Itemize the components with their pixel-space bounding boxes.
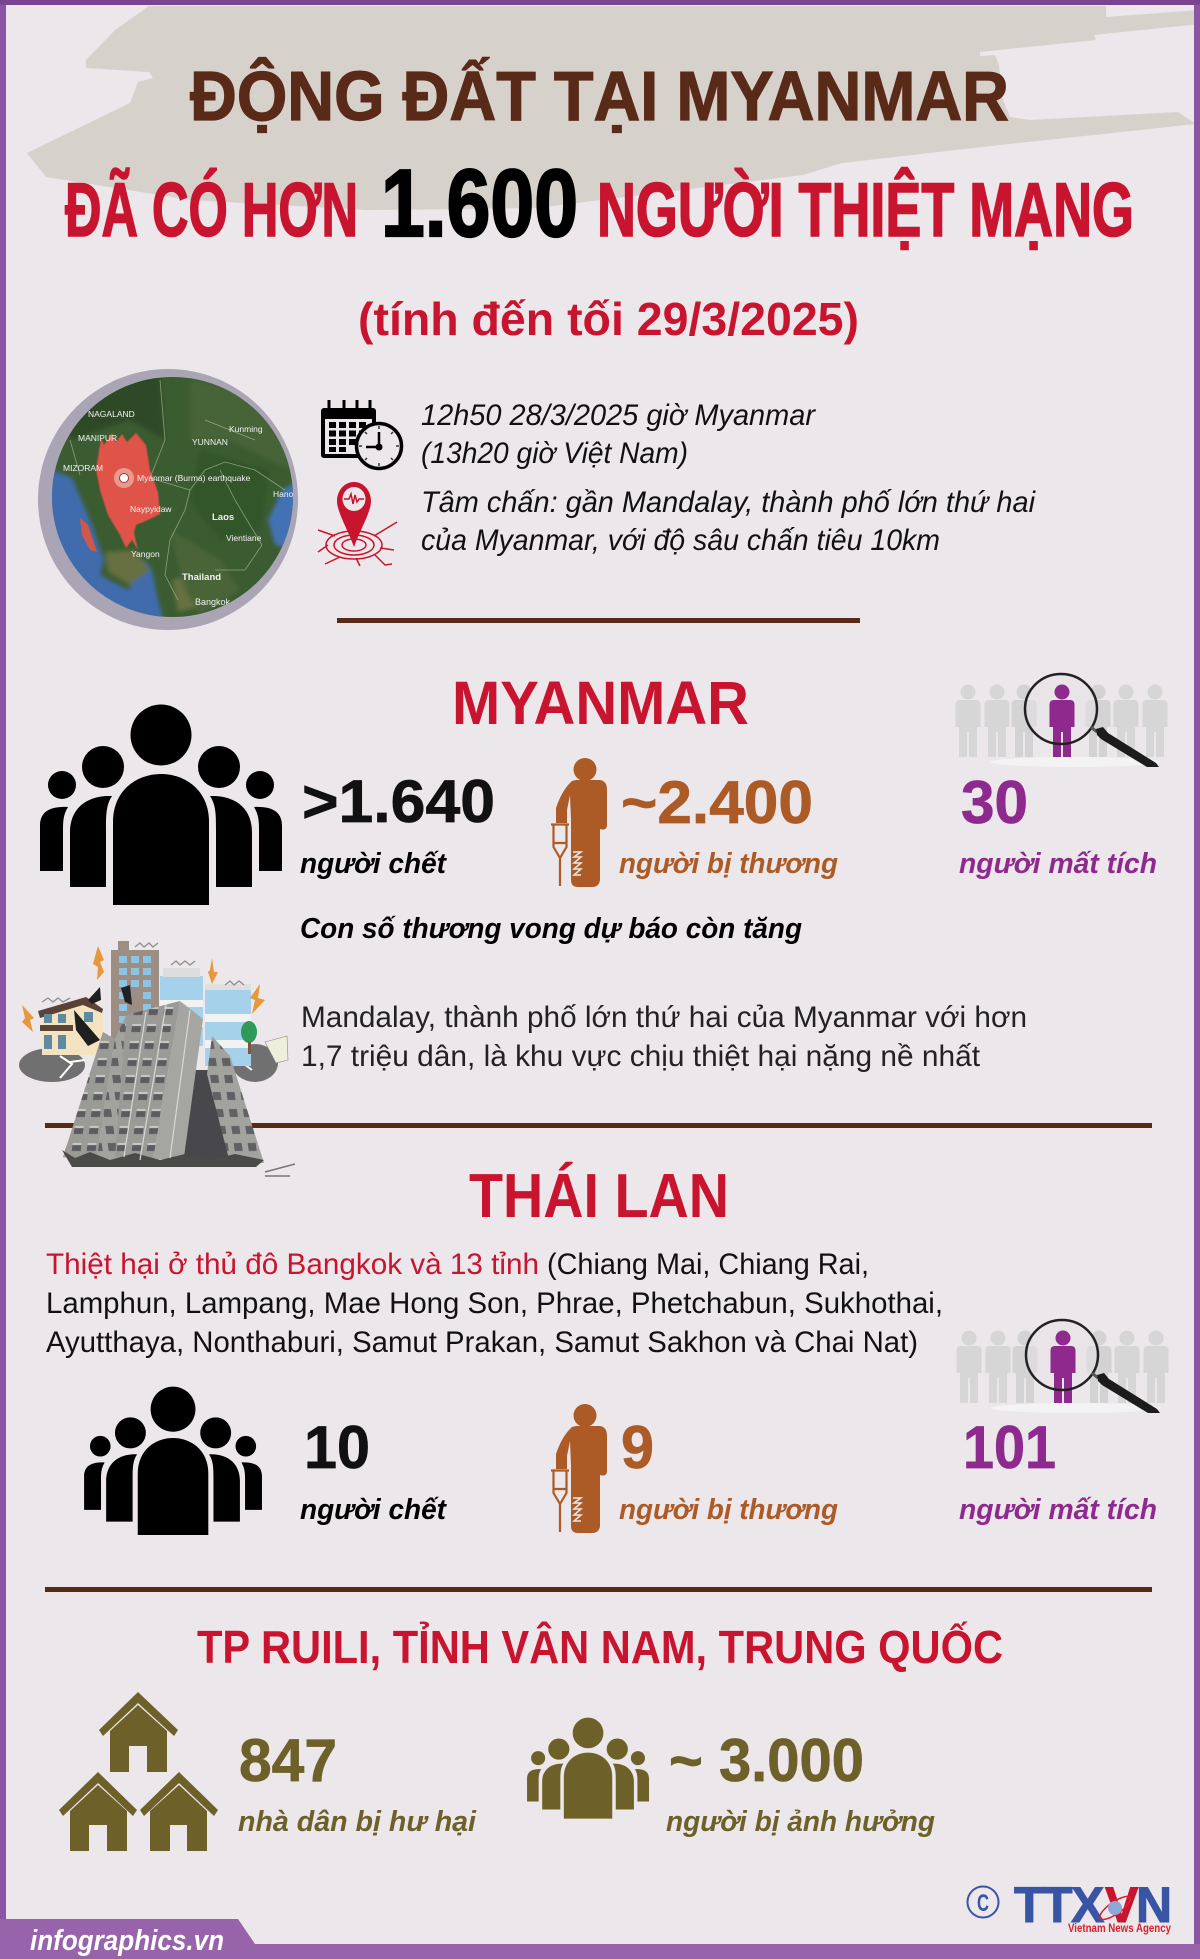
title line 1: ĐỘNG ĐẤT TẠI MYANMAR: [190, 56, 1009, 135]
heading: Myanmar: MYANMAR: [452, 669, 749, 737]
copyright mark: [968, 1886, 998, 1918]
epicentre line 1: Tâm chấn: gần Mandalay, thành phố lớn thứ hai: [421, 486, 1036, 519]
TTXVN logo: V: [1105, 1877, 1139, 1933]
map labels: Myanmar (Burma) earthquake: [137, 473, 251, 483]
icon: people, dead in Thailand: [84, 1387, 262, 1535]
province list line 3: Ayutthaya, Nonthaburi, Samut Prakan, Samut Sakhon và Chai Nat): [46, 1326, 918, 1359]
icon: people, dead in Myanmar: [40, 704, 282, 905]
map labels: Bangkok: [195, 597, 231, 607]
map labels: NAGALAND: [88, 409, 135, 419]
map labels: Kunming: [229, 424, 263, 434]
icon: three houses: [59, 1692, 218, 1851]
stat: missing in Myanmar: [959, 769, 1157, 880]
icon: injured person, Thailand: [551, 1404, 607, 1533]
TTXVN logo: N: [1136, 1877, 1172, 1933]
map labels: Naypyidaw: [130, 504, 172, 514]
house: [42, 998, 103, 1055]
note: toll expected to rise: Con số thương vong dự báo còn tăng: [300, 913, 802, 945]
stat: people affected: người bị ảnh hưởng: [666, 1806, 935, 1838]
stat: people affected: ~ 3.000: [669, 1727, 864, 1794]
stat: dead in Myanmar: [300, 768, 495, 880]
TTXVN logo: T: [1014, 1877, 1045, 1933]
site name: infographics.vn: [30, 1925, 224, 1957]
title line 2: [65, 150, 1134, 257]
heading: Ruili, China: TP RUILI, TỈNH VÂN NAM, TRUNG QUỐC: [197, 1621, 1003, 1673]
map of the earthquake zone: [38, 369, 300, 630]
stat: injured in Thailand: 9: [621, 1414, 654, 1481]
stat: injured in Thailand: [619, 1414, 838, 1526]
footer bar with site name: [0, 1919, 1200, 1959]
icon: calendar and clock: [321, 400, 402, 468]
stat: dead in Myanmar: người chết: [300, 848, 447, 880]
debris and collapsed slabs: [184, 1070, 235, 1165]
map labels: Thailand: [182, 572, 221, 583]
icon: people affected: [527, 1718, 649, 1819]
map labels: Yangon: [131, 549, 160, 559]
copyright mark: C: [977, 1890, 989, 1917]
province list line 2: Lamphun, Lampang, Mae Hong Son, Phrae, Phetchabun, Sukhothai,: [46, 1287, 943, 1320]
epicentre line 2: của Myanmar, với độ sâu chấn tiêu 10km: [421, 524, 940, 557]
stat: missing in Myanmar: 30: [961, 769, 1028, 836]
stat: dead in Myanmar: >1.640: [302, 768, 495, 835]
province list: (Chiang Mai, Chiang Rai,: [547, 1248, 869, 1281]
icon: magnifier over people, Thailand: [956, 1320, 1168, 1413]
map labels: Vientiane: [226, 533, 262, 543]
stat: damaged houses: 847: [239, 1727, 337, 1794]
time line 2: (13h20 giờ Việt Nam): [421, 437, 688, 470]
title: death toll figure: 1.600: [381, 150, 578, 257]
map labels: Laos: [212, 512, 234, 523]
map labels: MIZORAM: [63, 463, 103, 473]
right blue building: [205, 990, 251, 1066]
background tower: [111, 950, 159, 1050]
subtitle date: (tính đến tối 29/3/2025): [358, 293, 859, 345]
Mandalay description: [301, 1001, 1027, 1073]
stat: missing in Thailand: [959, 1414, 1157, 1526]
stat: injured in Thailand: người bị thương: [619, 1494, 838, 1526]
tree: [241, 1021, 257, 1043]
TTXVN logo: T: [1042, 1877, 1073, 1933]
map labels: Hanoi: [273, 489, 295, 499]
stat: damaged houses: nhà dân bị hư hại: [238, 1806, 477, 1838]
Mandalay description: 1,7 triệu dân, là khu vực chịu thiệt hại nặng nề nhất: [301, 1040, 981, 1073]
stat: dead in Thailand: người chết: [300, 1494, 447, 1526]
event details text: [421, 399, 1036, 557]
stat: people affected: [666, 1727, 935, 1838]
icon: epicentre pin: [318, 482, 397, 566]
stat: injured in Myanmar: ~2.400: [621, 769, 813, 836]
lightning bolts: [22, 946, 265, 1032]
stat: injured in Myanmar: người bị thương: [619, 848, 838, 880]
heading: Thailand: THÁI LAN: [469, 1162, 729, 1231]
Thailand description: [46, 1248, 943, 1359]
stat: missing in Thailand: người mất tích: [959, 1494, 1157, 1526]
map labels: YUNNAN: [192, 437, 228, 447]
TTXVN logo: Vietnam News Agency: [1068, 1923, 1172, 1935]
stat: dead in Thailand: 10: [304, 1414, 370, 1481]
Mandalay description: Mandalay, thành phố lớn thứ hai của Myanmar với hơn: [301, 1001, 1027, 1034]
middle blue building: [160, 976, 203, 1046]
damage summary in red: Thiệt hại ở thủ đô Bangkok và 13 tỉnh: [46, 1248, 539, 1281]
stat: injured in Myanmar: [619, 769, 838, 880]
stat: missing in Myanmar: người mất tích: [959, 848, 1157, 880]
TTXVN logo: X: [1071, 1877, 1104, 1933]
map labels: MANIPUR: [78, 433, 117, 443]
icon: magnifier over people, Myanmar: [956, 674, 1168, 767]
illustration: collapsed buildings: [19, 941, 295, 1176]
TTXVN logo: [1014, 1877, 1172, 1935]
stat: damaged houses: [238, 1727, 477, 1838]
icon: injured person, Myanmar: [551, 758, 607, 887]
stat: dead in Thailand: [300, 1414, 447, 1526]
time line 1: 12h50 28/3/2025 giờ Myanmar: [421, 399, 816, 432]
stat: missing in Thailand: 101: [963, 1414, 1056, 1481]
title: lead words: ĐÃ CÓ HƠN: [65, 168, 358, 253]
decorative brush shape behind title: [27, 6, 1200, 210]
